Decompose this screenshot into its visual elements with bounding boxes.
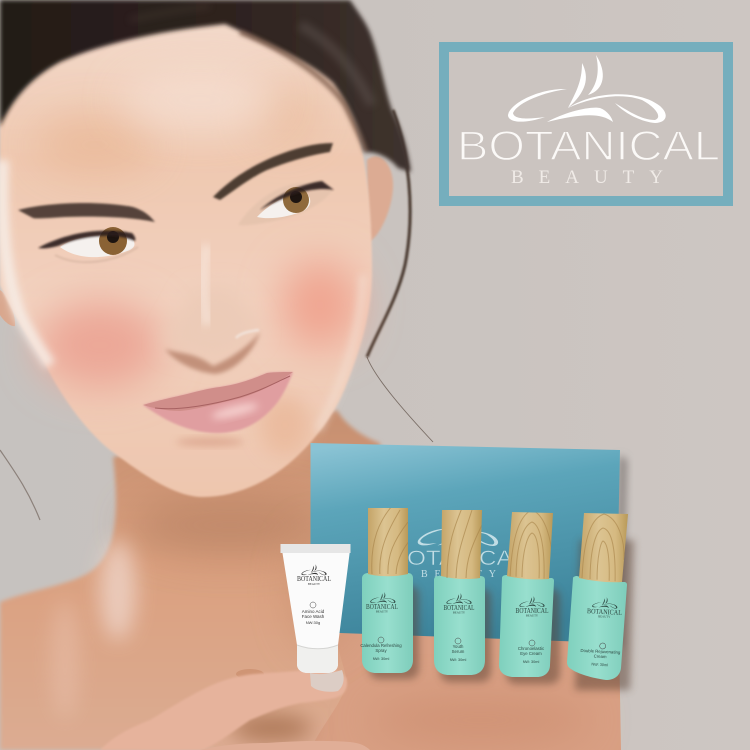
- product 5: double cream: BOTANICAL: [587, 607, 622, 617]
- product 1: tube: [280, 544, 350, 673]
- product 1: tube: BEAUTY: [308, 582, 321, 586]
- ear left: [0, 290, 15, 326]
- product 5: double cream: NW: 30ml: [591, 662, 608, 667]
- nose: [163, 245, 260, 374]
- packaging box: [310, 443, 627, 650]
- thumb knuckle: [236, 669, 264, 679]
- lips: [143, 372, 293, 446]
- box face: [310, 443, 620, 643]
- product 3: serum: Youth: [453, 644, 464, 649]
- product 3: serum: [434, 508, 485, 675]
- product 3: serum: Serum: [452, 649, 465, 654]
- product 2: spray: NW: 30ml: [373, 657, 389, 661]
- product 2: spray: [360, 506, 413, 673]
- right shoulder: [310, 625, 621, 750]
- left eye: [38, 227, 138, 262]
- facial shading: [2, 70, 363, 455]
- right eyebrow: [213, 143, 333, 200]
- product 1: tube: NW:30g: [306, 620, 320, 625]
- index finger: [100, 669, 347, 750]
- wordmark: BOTANICAL: [457, 122, 720, 169]
- product 1: tube: BOTANICAL: [297, 575, 331, 583]
- product shadows: [369, 540, 634, 690]
- product 2: spray: BOTANICAL: [366, 603, 398, 611]
- box shadow: [614, 455, 627, 650]
- tagline: BEAUTY: [511, 167, 663, 188]
- right eye: [238, 181, 334, 225]
- fingernail: [310, 670, 344, 692]
- product 3: serum: NW: 30ml: [450, 658, 466, 662]
- product 5: double cream: Double Rejuvenating: [580, 648, 621, 655]
- product 2: spray: Spray: [375, 648, 387, 653]
- product 5: double cream: [567, 513, 628, 680]
- box logo: BOTANICAL: [391, 547, 526, 570]
- ear right: [367, 156, 393, 242]
- product 4: eye cream: BEAUTY: [526, 614, 539, 618]
- product 4: eye cream: Chronoelastic: [518, 646, 545, 651]
- product 5: double cream: Cream: [594, 654, 607, 659]
- product 4: eye cream: NW: 30ml: [523, 660, 539, 664]
- lower finger: [200, 741, 370, 750]
- hair on top: [0, 0, 411, 172]
- face: [0, 15, 372, 497]
- box logo: [391, 511, 526, 580]
- neck and chest: [0, 410, 621, 750]
- product 1: tube: Amino Acid: [302, 609, 325, 614]
- product 3: serum: BOTANICAL: [444, 604, 474, 612]
- product 2: spray: Calendula Refreshing: [360, 643, 402, 648]
- product 2: spray: BEAUTY: [376, 610, 389, 614]
- hand: [100, 669, 370, 750]
- left eyebrow: [18, 203, 155, 222]
- product 1: tube: Face Wash: [302, 614, 325, 619]
- product 4: eye cream: Eye Cream: [520, 651, 542, 656]
- product 5: double cream: BEAUTY: [598, 614, 611, 619]
- box logo: BEAUTY: [421, 569, 496, 580]
- right hair strand: [0, 110, 433, 520]
- logo panel: [444, 47, 728, 201]
- product 3: serum: BEAUTY: [453, 610, 466, 614]
- product 4: eye cream: [499, 510, 554, 677]
- product 4: eye cream: BOTANICAL: [516, 607, 548, 615]
- logo mark: [508, 55, 666, 123]
